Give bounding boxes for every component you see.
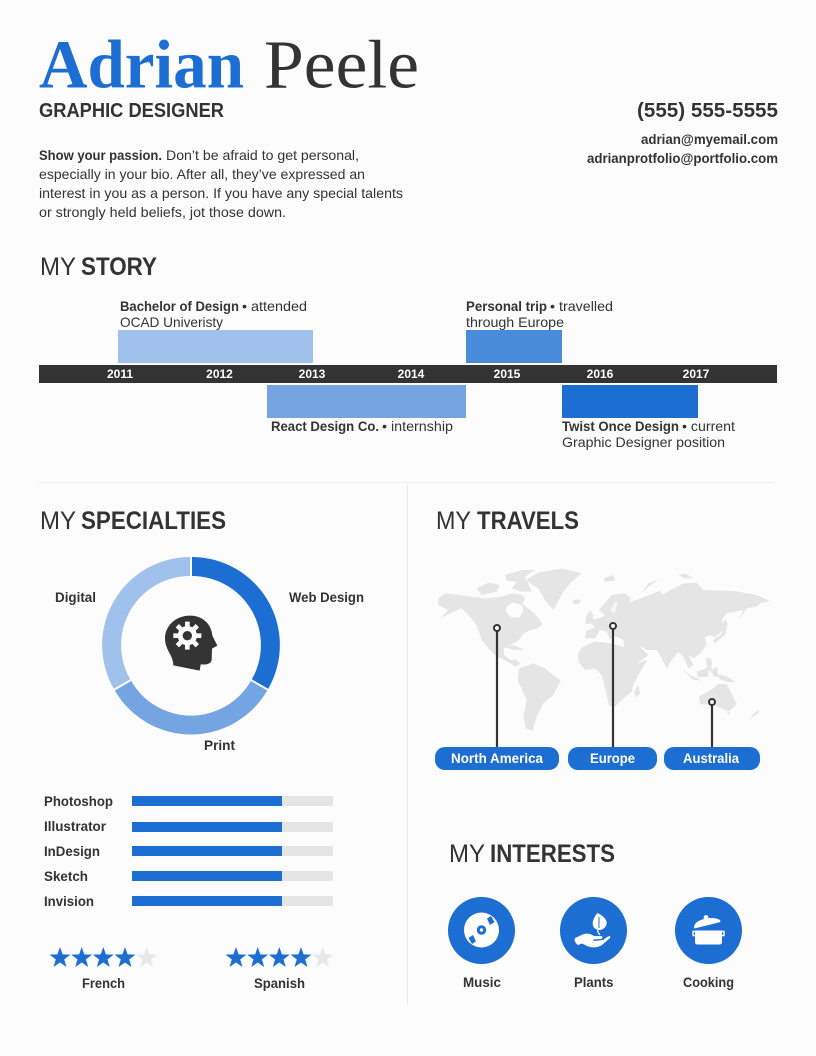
title: name: Adrian — [39, 26, 244, 102]
period: react design: • internship — [382, 418, 453, 434]
donut labels: Digital — [55, 589, 96, 605]
heading: my travels: MY — [436, 507, 471, 535]
timeline bar with years: 2011 — [107, 367, 133, 381]
period: personal trip: Personal trip — [466, 298, 547, 314]
label pill: australia — [664, 747, 760, 770]
period: bachelor of design: Bachelor of Design — [120, 298, 239, 314]
text block: bio: interest in you as a person. If you have any special talents — [39, 185, 403, 201]
skill: photoshop: Photoshop — [44, 793, 113, 809]
skill: indesign — [44, 843, 333, 859]
period: react design — [267, 385, 466, 434]
interest: plants — [560, 897, 627, 990]
text block: contact details: adrianprotfolio@portfolio.com — [587, 150, 778, 166]
skill: invision — [44, 893, 333, 909]
title: name — [39, 26, 419, 102]
timeline bar with years: 2014 — [398, 367, 425, 381]
language rating: french — [50, 947, 157, 991]
timeline — [39, 298, 777, 450]
text block: contact details: (555) 555-5555 — [637, 100, 778, 122]
skill: sketch: Sketch — [44, 868, 88, 884]
period: twist once design: Graphic Designer position — [562, 434, 725, 450]
interest: music: Music — [463, 974, 501, 990]
timeline bar with years: 2016 — [587, 367, 614, 381]
period: personal trip — [466, 298, 613, 363]
period: twist once design — [562, 385, 735, 450]
skill: illustrator — [44, 818, 333, 834]
heading: my interests: INTERESTS — [490, 840, 615, 868]
interest: plants: Plants — [574, 974, 614, 990]
donut chart — [102, 557, 280, 734]
period: bachelor of design — [118, 298, 313, 363]
period: bachelor of design: • attended — [242, 298, 307, 314]
timeline bar with years: 2017 — [683, 367, 710, 381]
period: twist once design: • current — [682, 418, 735, 434]
heading: my specialties: SPECIALTIES — [81, 507, 226, 535]
icon: disc — [464, 912, 499, 948]
label pill: north america: North America — [451, 750, 543, 766]
text block: bio: Show your passion. — [39, 147, 162, 163]
text block: contact details: adrian@myemail.com — [641, 131, 778, 147]
heading: my travels: TRAVELS — [477, 507, 579, 535]
text block: contact details — [587, 100, 778, 166]
skill: illustrator: Illustrator — [44, 818, 107, 834]
timeline bar with years: 2015 — [494, 367, 521, 381]
skill bars — [44, 793, 333, 909]
period: personal trip: through Europe — [466, 314, 564, 330]
donut labels — [55, 589, 364, 753]
period: twist once design: Twist Once Design — [562, 418, 679, 434]
period: bachelor of design: OCAD Univeristy — [120, 314, 223, 330]
heading: my story: STORY — [81, 253, 157, 281]
language rating: french: French — [82, 975, 125, 991]
heading: my specialties: MY — [40, 507, 76, 535]
subtitle: job title: GRAPHIC DESIGNER — [39, 100, 225, 122]
heading: my interests — [449, 840, 615, 868]
interest: cooking — [675, 897, 742, 990]
timeline bar with years: 2013 — [299, 367, 326, 381]
period: personal trip: • travelled — [550, 298, 613, 314]
skill: indesign: InDesign — [44, 843, 100, 859]
label pill: australia: Australia — [683, 750, 739, 766]
language rating: spanish — [226, 947, 333, 991]
text block: bio: Don’t be afraid to get personal, — [166, 147, 359, 163]
icon: hand holding plant — [575, 913, 610, 947]
language rating: spanish: Spanish — [254, 975, 305, 991]
world map — [438, 568, 770, 731]
icon: cooking pot — [693, 915, 724, 944]
timeline bar with years — [39, 365, 777, 383]
heading: my story — [40, 253, 157, 281]
map pin: europe — [610, 623, 616, 748]
label pill: europe — [568, 747, 657, 770]
donut labels: Print — [204, 737, 235, 753]
skill: invision: Invision — [44, 893, 94, 909]
donut labels: Web Design — [289, 589, 364, 605]
title: name: Peele — [264, 26, 419, 102]
map pin: australia — [709, 699, 715, 748]
label pill: north america — [435, 747, 559, 770]
timeline bar with years: 2012 — [206, 367, 233, 381]
skill: sketch — [44, 868, 333, 884]
icon: head with gear — [165, 616, 217, 671]
text block: bio: or strongly held beliefs, jot those down. — [39, 204, 286, 220]
skill: photoshop — [44, 793, 333, 809]
label pill: europe: Europe — [590, 750, 635, 766]
interest: music — [448, 897, 515, 990]
period: react design: React Design Co. — [271, 418, 379, 434]
interest: cooking: Cooking — [683, 974, 734, 990]
heading: my story: MY — [40, 253, 76, 281]
heading: my interests: MY — [449, 840, 485, 868]
text block: bio: especially in your bio. After all, they’ve expressed an — [39, 166, 365, 182]
map pin: north america — [494, 625, 500, 748]
heading: my travels — [436, 507, 579, 535]
text block: bio — [39, 147, 403, 220]
